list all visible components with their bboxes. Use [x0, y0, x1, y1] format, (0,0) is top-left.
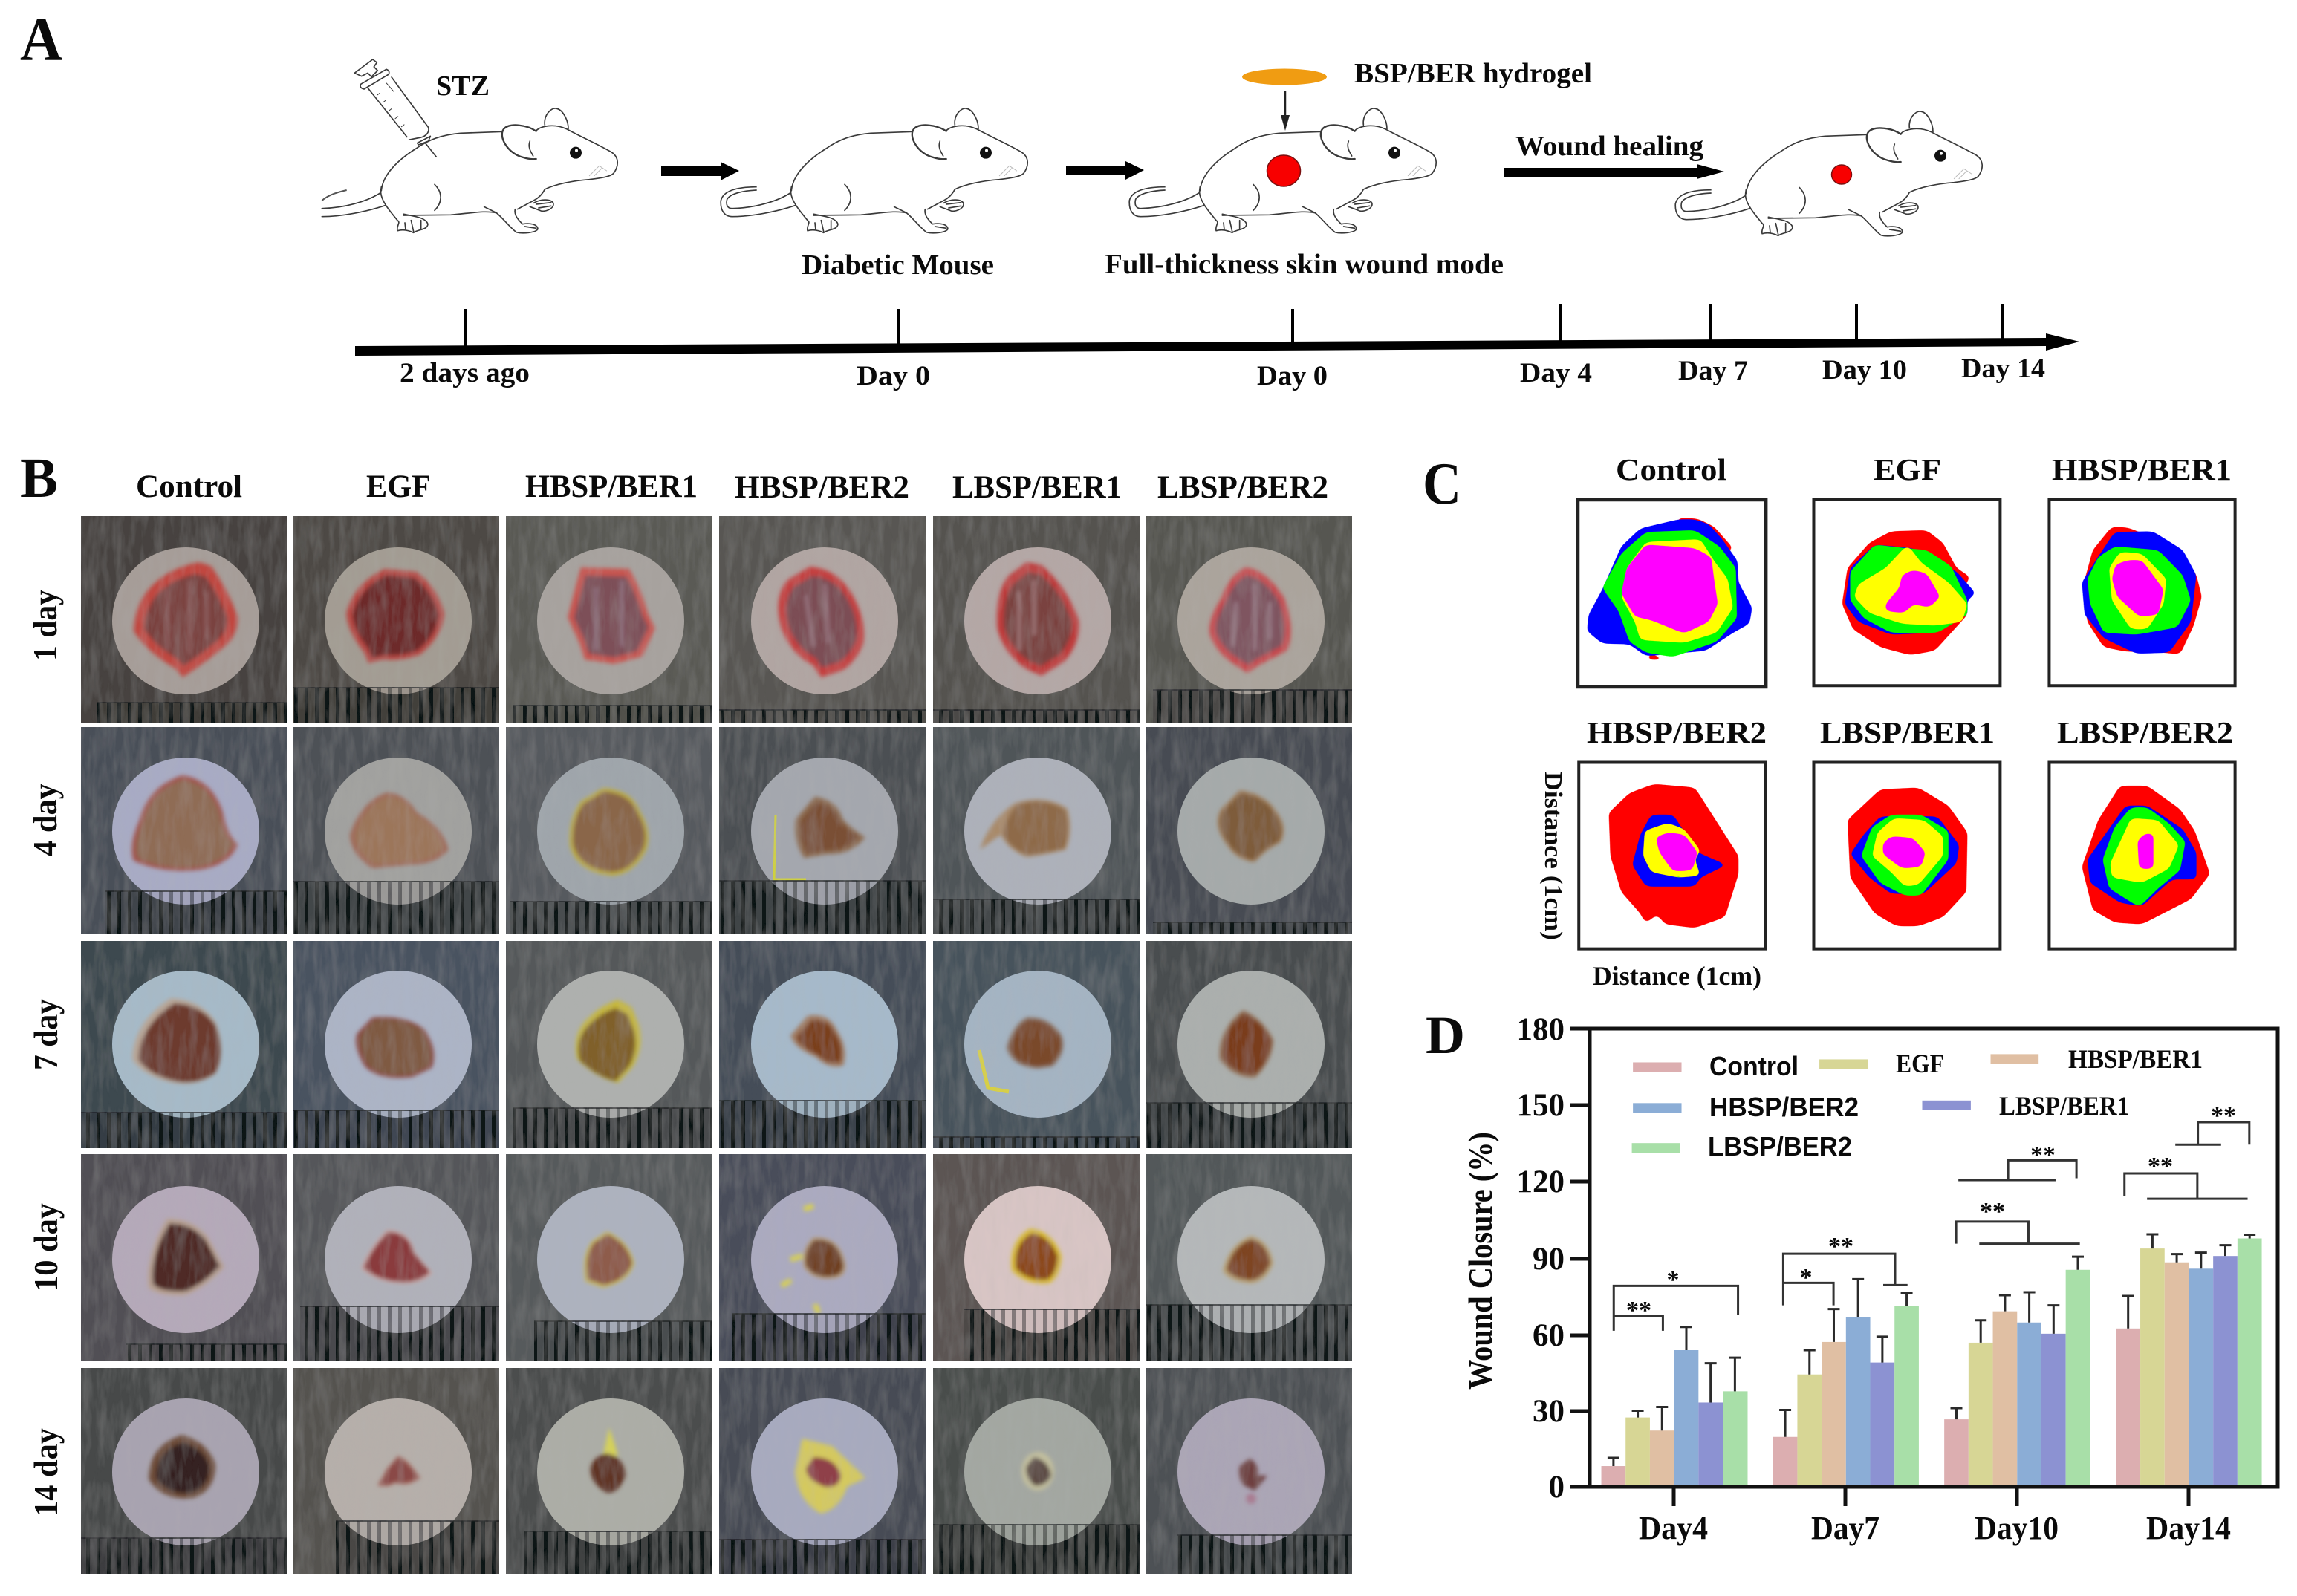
map: LBSP/BER2 [2049, 763, 2235, 949]
panel B: wound photographs [20, 447, 1352, 1574]
column headings [136, 469, 1328, 505]
panel letter B: B [20, 447, 58, 509]
Day7 bars [1773, 1279, 1919, 1487]
timeline labels: Day 10 [1822, 355, 1907, 385]
x axis labels: Day10 [1975, 1510, 2059, 1546]
column headings: HBSP/BER1 [525, 469, 698, 504]
legend labels: LBSP/BER1 [1999, 1091, 2129, 1121]
timeline labels: Day 0 [1257, 361, 1328, 391]
legend labels: HBSP/BER1 [2068, 1044, 2203, 1074]
plot frame and ticks [1570, 1029, 2278, 1506]
photo grid [81, 516, 1352, 1574]
legend labels: HBSP/BER2 [1709, 1092, 1859, 1122]
arrow 2 [1066, 161, 1144, 180]
column headings: LBSP/BER2 [1157, 470, 1328, 505]
x axis labels: Day14 [2146, 1510, 2231, 1546]
significance stars: ** [1828, 1233, 1853, 1260]
bars [1602, 1054, 2262, 1487]
legend labels: Control [1709, 1051, 1799, 1081]
significance stars: ** [2148, 1153, 2173, 1180]
column headings: Control [136, 469, 242, 504]
map: HBSP/BER2 [1579, 763, 1766, 949]
Day4 bars [1602, 1327, 1747, 1487]
y axis numbers: 0 [1548, 1470, 1565, 1505]
mouse with wound and hydrogel [1129, 68, 1436, 233]
significance stars: * [1799, 1264, 1813, 1292]
panel A: experimental timeline [20, 5, 2079, 391]
map headings: HBSP/BER2 [1587, 715, 1767, 749]
y axis title: Wound Closure (%) [1461, 1132, 1499, 1390]
row headings: 7 day [27, 999, 65, 1070]
map headings: Control [1616, 452, 1726, 486]
y axis numbers: 120 [1517, 1165, 1565, 1199]
map: HBSP/BER1 [2049, 500, 2235, 685]
row headings [26, 590, 65, 1517]
legend swatches [1632, 1054, 2038, 1153]
panel letter D: D [1426, 1006, 1465, 1065]
legend labels [1708, 1044, 2203, 1162]
label: Diabetic Mouse: Diabetic Mouse [802, 250, 994, 281]
Day10 bars [1944, 1257, 2090, 1487]
map headings [1587, 452, 2233, 749]
significance stars: ** [1626, 1297, 1651, 1324]
y axis numbers: 150 [1517, 1088, 1565, 1123]
timeline labels: Day 4 [1520, 358, 1592, 388]
row: 7 day [81, 941, 1352, 1148]
x axis labels [1639, 1510, 2231, 1546]
map headings: LBSP/BER1 [1820, 715, 1995, 749]
column headings: HBSP/BER2 [735, 470, 909, 505]
label: BSP/BER hydrogel: BSP/BER hydrogel [1354, 58, 1592, 89]
mouse with STZ syringe [322, 59, 617, 233]
arrow 1 [661, 162, 739, 180]
timeline labels: Day 0 [857, 361, 930, 391]
row: 10 day [81, 1154, 1352, 1361]
timeline labels: Day 7 [1678, 356, 1748, 386]
significance stars [1626, 1102, 2236, 1324]
map headings: EGF [1874, 452, 1941, 486]
y axis numbers: 30 [1533, 1394, 1565, 1429]
x axis labels: Day7 [1811, 1510, 1879, 1546]
significance brackets [1614, 1122, 2249, 1331]
panel letter A: A [20, 5, 62, 74]
row: 4 day [81, 727, 1352, 934]
y axis numbers: 180 [1517, 1012, 1565, 1047]
arrow 3 [1504, 164, 1724, 179]
row headings: 10 day [27, 1203, 65, 1292]
x axis labels: Day4 [1639, 1510, 1708, 1546]
row headings: 4 day [26, 784, 64, 856]
panel letter C: C [1423, 452, 1461, 517]
contour maps [1578, 500, 2235, 949]
panel D: wound closure bar chart [1426, 1006, 2278, 1546]
map: LBSP/BER1 [1813, 763, 2000, 949]
map headings: LBSP/BER2 [2057, 715, 2233, 749]
axis label: horizontal distance: Distance (1cm) [1593, 961, 1761, 991]
axis label: vertical distance: Distance (1cm) [1539, 772, 1567, 940]
significance stars: * [1667, 1266, 1679, 1294]
label: Full-thickness skin wound mode: Full-thickness skin wound mode [1105, 249, 1504, 280]
row: 1 day [81, 516, 1352, 723]
label: STZ: STZ [436, 71, 490, 102]
column headings: EGF [366, 469, 431, 504]
row headings: 14 day [27, 1428, 65, 1517]
map: EGF [1813, 500, 2000, 685]
timeline arrow [355, 304, 2079, 356]
significance stars: ** [2030, 1141, 2056, 1169]
y axis numbers: 60 [1533, 1318, 1565, 1353]
y axis numbers [1517, 1012, 1565, 1505]
significance stars: ** [2211, 1102, 2236, 1130]
timeline labels: Day 14 [1961, 354, 2045, 384]
label: Wound healing: Wound healing [1515, 131, 1703, 162]
timeline labels: 2 days ago [400, 358, 530, 388]
significance stars: ** [1980, 1198, 2005, 1225]
Day14 bars [2116, 1234, 2262, 1487]
timeline labels [400, 354, 2045, 391]
map headings: HBSP/BER1 [2052, 452, 2232, 486]
column headings: LBSP/BER1 [952, 470, 1122, 505]
icon: syringe [354, 59, 437, 157]
y axis numbers: 90 [1533, 1242, 1565, 1277]
healed mouse [1675, 111, 1982, 236]
panel C: wound trace maps [1423, 452, 2235, 991]
legend labels: LBSP/BER2 [1708, 1131, 1852, 1162]
row: 14 day [81, 1368, 1352, 1574]
map: Control [1578, 500, 1766, 687]
diabetic mouse [721, 108, 1027, 233]
legend labels: EGF [1896, 1049, 1944, 1078]
row headings: 1 day [26, 590, 64, 661]
